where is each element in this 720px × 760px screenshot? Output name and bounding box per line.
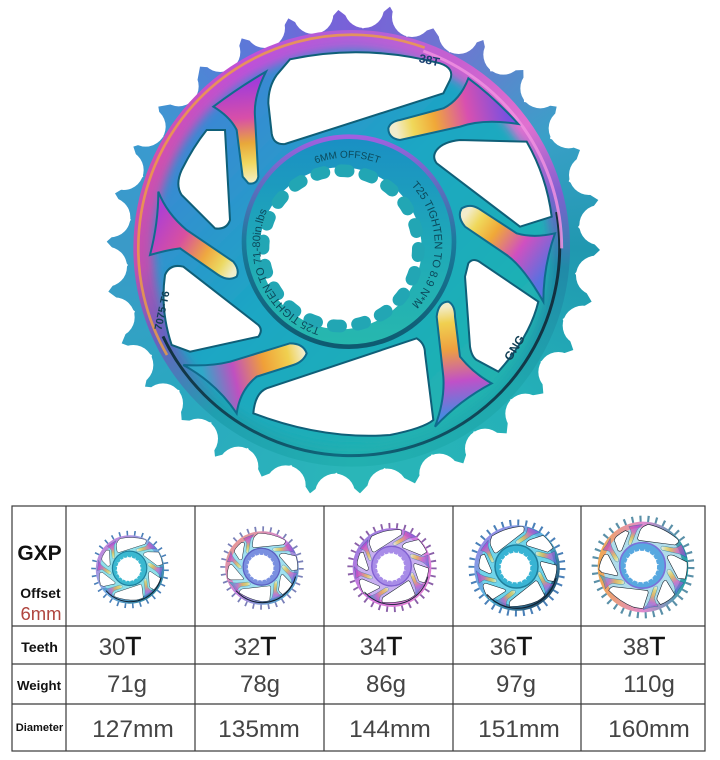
value: 135mm: 135mm (218, 716, 300, 743)
header: Diameter: Diameter (16, 722, 64, 734)
header: Teeth: Teeth (21, 640, 58, 656)
engraving: 38T: 38T (418, 51, 442, 69)
window cut-outs (164, 52, 552, 436)
teeth row values (99, 631, 665, 661)
spokes (150, 72, 555, 427)
table grid (12, 506, 705, 751)
chainring thumbnail: 36T (465, 516, 569, 618)
chainring thumbnail: 32T (221, 527, 304, 608)
value: 144mm: 144mm (349, 716, 431, 743)
engraving: GNG: GNG (501, 333, 528, 363)
value: 151mm: 151mm (478, 716, 560, 743)
spoke: left (150, 192, 238, 279)
rim orange highlight (138, 35, 425, 355)
chainring thumbnail: 38T (586, 510, 701, 622)
chainring teeth (90, 0, 620, 500)
value: 36T: 36T (490, 631, 532, 661)
value: 127mm: 127mm (92, 716, 174, 743)
value: 30T: 30T (99, 631, 141, 661)
diameter row values (92, 716, 690, 743)
value: 32T: 32T (234, 631, 276, 661)
rounded valleys between teeth (112, 12, 595, 489)
header: Offset: Offset (20, 585, 61, 601)
chainring outer rim (133, 30, 570, 466)
header: Weight: Weight (17, 678, 62, 693)
spoke: top left (213, 72, 266, 184)
rim pink highlight (423, 51, 562, 248)
value: 78g: 78g (240, 671, 280, 698)
engraving: left torque: T25 TIGHTEN TO 71-80in.lbs (252, 209, 318, 335)
main chainring photo illustration (106, 6, 600, 494)
value: 86g: 86g (366, 671, 406, 698)
spoke: top right (388, 78, 518, 140)
spoke: bottom left (183, 343, 307, 413)
row headers (16, 542, 64, 734)
splined centre hole (260, 167, 422, 329)
hub engraving (252, 150, 442, 335)
value: 110g: 110g (623, 671, 675, 698)
engraving: right torque: T25 TIGHTEN TO 8.9 N*M (412, 180, 442, 308)
engraving: 7075-T6: 7075-T6 (153, 290, 173, 331)
engraving: 6MM OFFSET: 6MM OFFSET (314, 150, 381, 163)
comparison table (11, 505, 706, 752)
spoke: right (460, 206, 555, 302)
header: 6mm: 6mm (20, 603, 62, 624)
chainring thumbnail: 34T (346, 522, 438, 611)
value: 97g: 97g (496, 671, 536, 698)
header: GXP: GXP (17, 542, 62, 565)
hub ring (244, 137, 454, 347)
rim inner dark line (163, 212, 560, 456)
chainring thumbnail: 30T (94, 533, 166, 606)
value: 38T: 38T (623, 631, 665, 661)
value: 34T: 34T (360, 631, 402, 661)
value: 160mm: 160mm (608, 716, 690, 743)
value: 71g: 71g (107, 671, 147, 698)
chainring web, spokes and hub (136, 33, 564, 458)
spoke: bottom right (435, 302, 492, 427)
web disc (153, 50, 550, 447)
weight row values (107, 671, 675, 698)
